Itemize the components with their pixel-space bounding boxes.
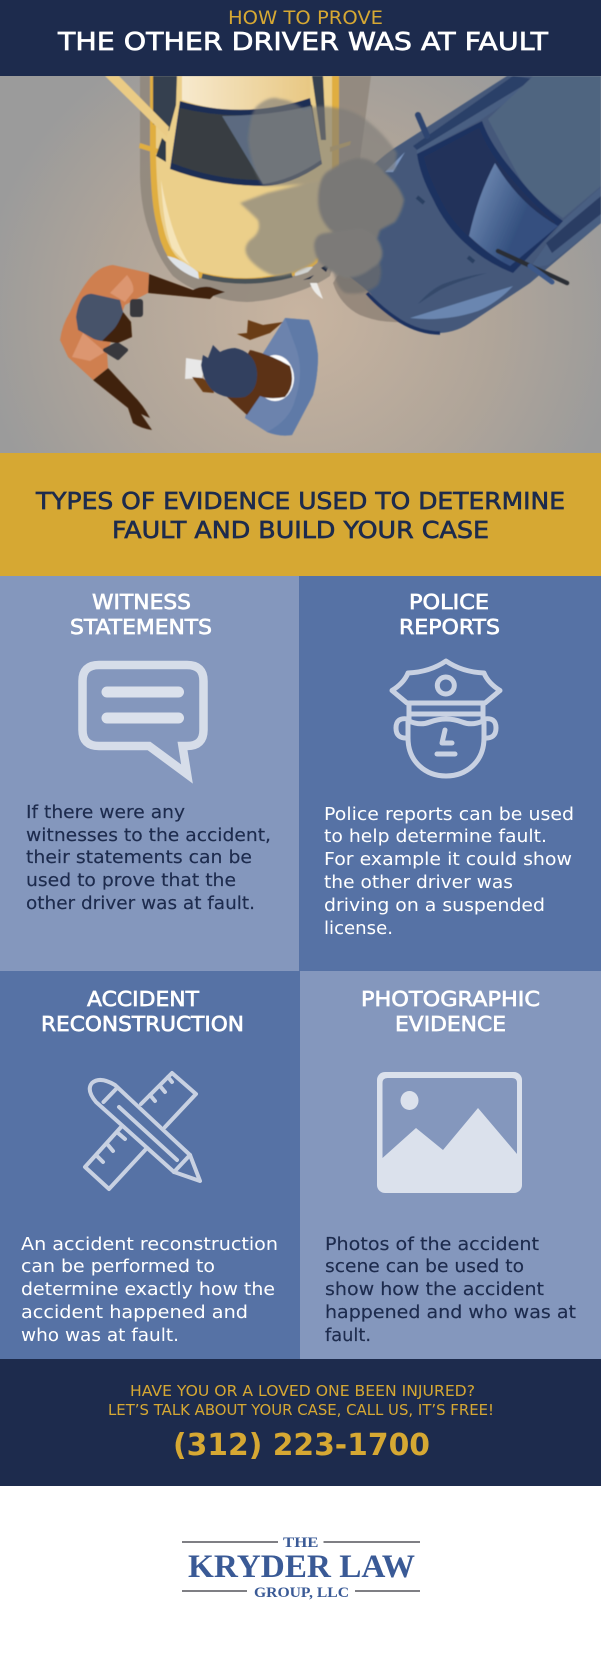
- face: [102, 312, 132, 343]
- front edge: [367, 293, 440, 333]
- arm reaching down: [93, 368, 152, 430]
- windshield: [170, 98, 322, 186]
- heading: PHOTOGRAPHIC: [361, 987, 540, 1011]
- headlights: [167, 256, 199, 279]
- hand raised: [237, 320, 283, 340]
- hood crease: [420, 274, 481, 302]
- body text: determine exactly how the: [21, 1279, 275, 1300]
- body text: [21, 1234, 278, 1346]
- shoulder objects: [130, 299, 143, 317]
- icon: police officer: [392, 661, 500, 776]
- logo: The Kryder Law Group: GROUP, LLC: [254, 1585, 349, 1601]
- blue car shadow: [332, 276, 398, 322]
- blue shirt: [244, 318, 300, 432]
- footer call to action: [0, 1359, 601, 1486]
- title kicker: HOW TO PROVE: [228, 7, 383, 29]
- body text: scene can be used to: [325, 1256, 524, 1277]
- body text: license.: [324, 918, 393, 939]
- hair: [201, 345, 257, 398]
- body text: fault.: [325, 1325, 371, 1346]
- body text: to help determine fault.: [324, 826, 547, 847]
- body text: used to prove that the: [26, 870, 236, 891]
- panel: police reports: REPORTS: [399, 615, 500, 639]
- side strip: [530, 187, 601, 268]
- driver in orange shirt: [60, 265, 225, 430]
- windshield wiper: [498, 251, 567, 283]
- blue car: [340, 76, 601, 333]
- heading: ACCIDENT: [87, 987, 200, 1011]
- hood highlight: [410, 286, 513, 319]
- open door: [105, 76, 169, 137]
- driver in blue shirt holding paper: [185, 318, 318, 436]
- panel: accident reconstruction: RECONSTRUCTION: [41, 1012, 244, 1036]
- body text: other driver was at fault.: [26, 893, 255, 914]
- panel: accident reconstruction: [0, 971, 300, 1359]
- mirror: [418, 115, 427, 136]
- body text: happened and who was at: [325, 1302, 576, 1323]
- body text: show how the accident: [325, 1279, 544, 1300]
- panel: witness statements: STATEMENTS: [70, 615, 212, 639]
- panel: witness statements: [0, 576, 299, 971]
- heading: POLICE: [409, 590, 489, 614]
- body text: driving on a suspended: [324, 895, 545, 916]
- white collar: [264, 354, 295, 402]
- icon: photo: [377, 1072, 522, 1193]
- body text: [26, 802, 271, 914]
- logo: The Kryder Law Group: KRYDER LAW: [188, 1549, 415, 1585]
- body text: If there were any: [26, 802, 185, 823]
- body text: who was at fault.: [21, 1325, 179, 1346]
- section heading: TYPES OF EVIDENCE USED TO DETERMINE: [35, 489, 565, 515]
- bumper: [202, 275, 292, 281]
- car roof: [182, 76, 284, 110]
- paper: [185, 358, 206, 379]
- crash shards: [304, 266, 328, 299]
- smoke clouds: [240, 98, 404, 294]
- body text: accident happened and: [21, 1302, 248, 1323]
- cap: [76, 294, 123, 341]
- main title: THE OTHER DRIVER WAS AT FAULT: [57, 27, 549, 56]
- body text: [325, 1234, 576, 1346]
- top side strip: [413, 76, 534, 150]
- call to action text: HAVE YOU OR A LOVED ONE BEEN INJURED?: [130, 1382, 475, 1400]
- gold section heading band: FAULT AND BUILD YOUR CASE: [112, 518, 489, 544]
- yellow car: [105, 76, 351, 283]
- body text: their statements can be: [26, 847, 252, 868]
- body text: [324, 804, 574, 939]
- phone number: (312) 223-1700: [173, 1428, 430, 1463]
- body text: Photos of the accident: [325, 1234, 539, 1255]
- body text: An accident reconstruction: [21, 1234, 278, 1255]
- orange shirt: [60, 265, 149, 380]
- panel: photographic evidence: [300, 971, 601, 1359]
- header banner: [0, 0, 601, 76]
- illustration: top-down view of two cars after a collision with two drivers: [0, 76, 601, 453]
- logo: The Kryder Law Group: [182, 1535, 420, 1601]
- gold section heading band: [0, 453, 601, 576]
- arm reaching up: [148, 274, 225, 299]
- logo: The Kryder Law Group: THE: [283, 1535, 318, 1551]
- icon: speech bubble: [82, 665, 204, 774]
- right mirror: [330, 141, 351, 152]
- side windows: [153, 76, 177, 131]
- body text: Police reports can be used: [324, 804, 574, 825]
- body text: For example it could show: [324, 849, 572, 870]
- neck and back: [225, 350, 292, 415]
- heading: WITNESS: [92, 590, 191, 614]
- panel: police reports: [299, 576, 601, 971]
- vents: [417, 197, 474, 262]
- yellow car shadow: [140, 76, 371, 302]
- footer call to action: LET’S TALK ABOUT YOUR CASE, CALL US, IT’S FREE!: [108, 1401, 494, 1419]
- left mirror: [138, 142, 159, 154]
- windshield: [417, 121, 563, 273]
- body text: the other driver was: [324, 872, 513, 893]
- panel: photographic evidence: EVIDENCE: [395, 1012, 506, 1036]
- body text: witnesses to the accident,: [26, 825, 271, 846]
- icon: pencil and ruler: [85, 1073, 200, 1189]
- body text: can be performed to: [21, 1256, 215, 1277]
- roof: [488, 76, 601, 218]
- forearm: [192, 377, 214, 393]
